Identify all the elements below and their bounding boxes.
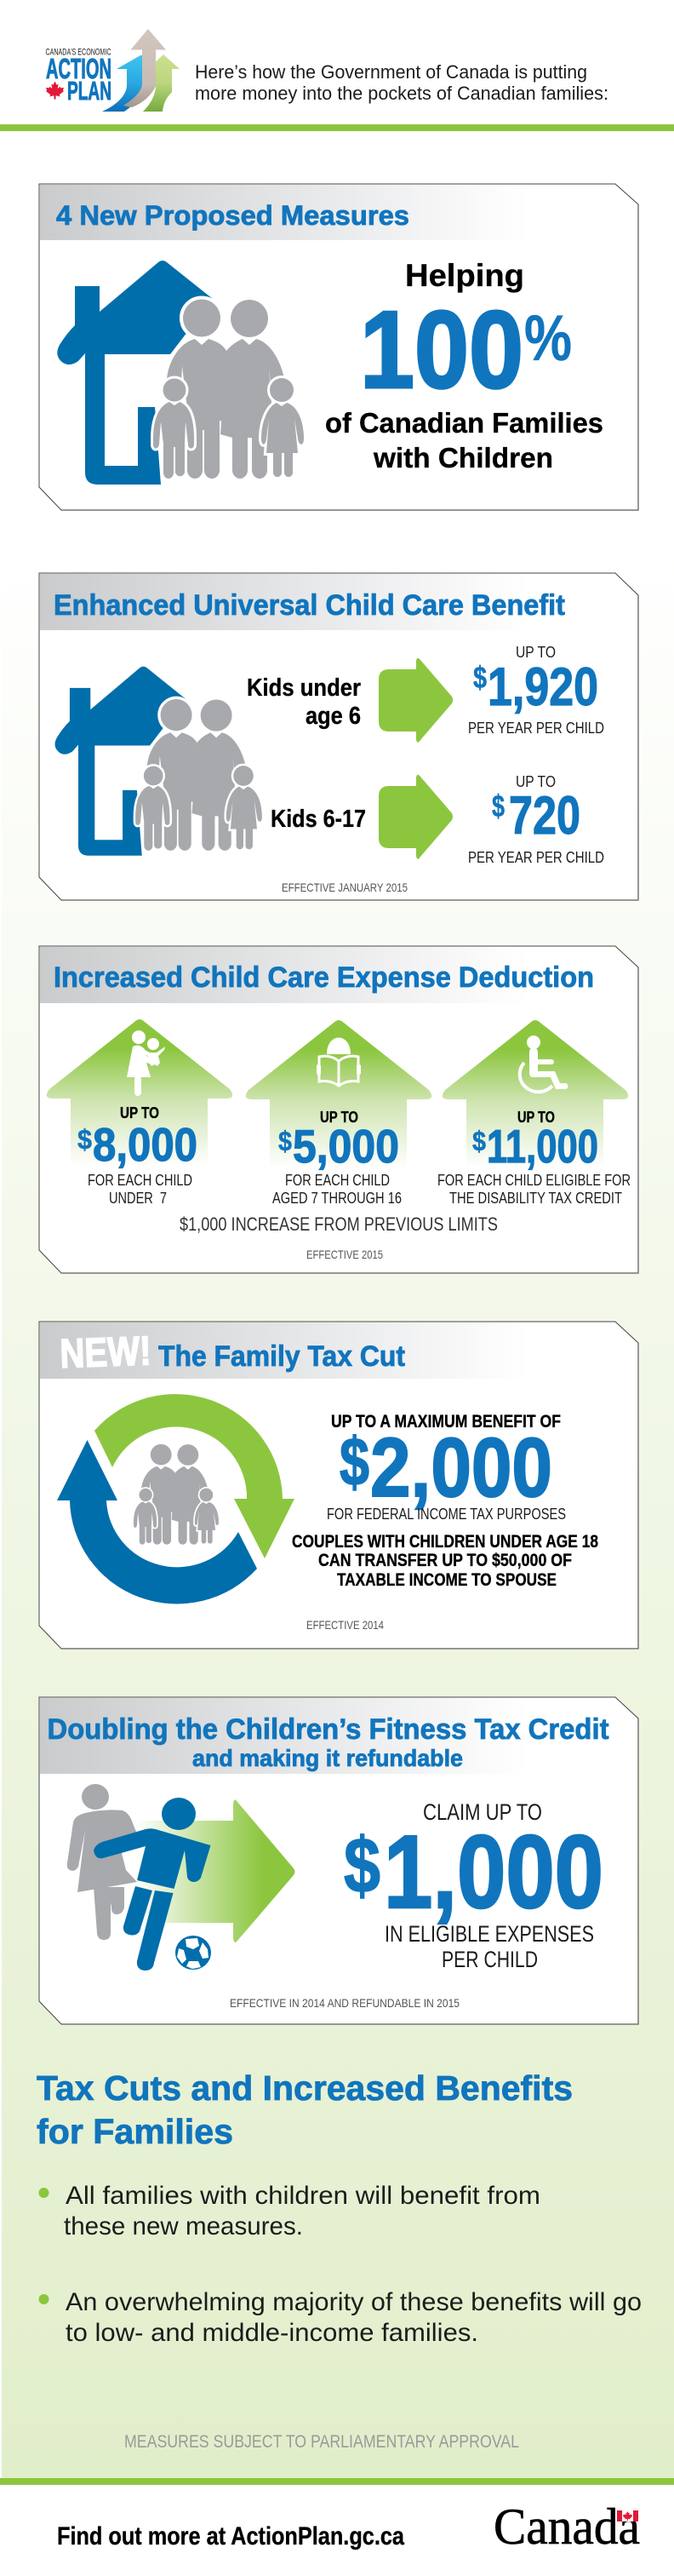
stat: helping 100%: Helping — [405, 258, 524, 293]
heading — [48, 1713, 609, 1771]
heading: 4 New Proposed Measures — [56, 200, 409, 231]
claim text: IN ELIGIBLE EXPENSES — [385, 1921, 594, 1947]
icon: adult figure — [67, 1784, 141, 1940]
bullet: overwhelming majority: to low- and middle-income families. — [66, 2319, 478, 2347]
wordmark: Canada: Canada — [494, 2499, 640, 2555]
icon: circular arrows — [57, 1394, 294, 1604]
row: kids 6-17: Kids 6-17 — [271, 806, 366, 833]
icon: soccer ball — [175, 1936, 211, 1970]
benefit text — [292, 1412, 598, 1590]
logo: Canada's Economic Action Plan: ACTION — [46, 53, 111, 84]
page background — [2, 545, 674, 2478]
benefit text: $ — [340, 1424, 369, 1500]
column: disability tax credit: THE DISABILITY TAX CREDIT — [449, 1190, 622, 1207]
intro text — [195, 61, 608, 104]
column: child aged 7 through 16: 5,000 — [293, 1120, 399, 1173]
heading: The Family Tax Cut — [158, 1340, 405, 1373]
bullet: overwhelming majority — [39, 2288, 642, 2347]
row: kids under age 6: PER YEAR PER CHILD — [468, 720, 604, 737]
intro text: more money into the pockets of Canadian families: — [195, 83, 608, 104]
heading: Enhanced Universal Child Care Benefit — [54, 589, 565, 622]
panel: enhanced universal child care benefit — [39, 573, 638, 900]
bullet: overwhelming majority: An overwhelming majority of these benefits will go — [66, 2288, 642, 2316]
row: kids 6-17: 720 — [509, 786, 580, 846]
claim text: CLAIM UP TO — [423, 1799, 542, 1825]
benefit text: COUPLES WITH CHILDREN UNDER AGE 18 — [292, 1532, 598, 1552]
stat: helping 100%: 100 — [360, 289, 523, 411]
benefit text: UP TO A MAXIMUM BENEFIT OF — [331, 1412, 561, 1431]
row: kids under age 6: Kids under — [247, 674, 361, 702]
claim text — [344, 1799, 603, 1972]
top green rule — [0, 124, 674, 131]
icon: parent and baby — [127, 1030, 165, 1096]
heading: Increased Child Care Expense Deduction — [54, 961, 594, 994]
benefit text: CAN TRANSFER UP TO $50,000 OF — [318, 1551, 572, 1570]
icon: soccer player — [94, 1798, 211, 1971]
bullet: all families: these new measures. — [64, 2212, 303, 2240]
note: increase from previous limits: $1,000 INCREASE FROM PREVIOUS LIMITS — [180, 1213, 498, 1235]
effective date: EFFECTIVE 2014 — [306, 1618, 384, 1632]
heading: tax cuts and increased benefits — [37, 2068, 573, 2151]
claim text: PER CHILD — [442, 1947, 538, 1972]
icon: house and family — [57, 261, 304, 485]
column: child aged 7 through 16: AGED 7 THROUGH 16 — [272, 1190, 402, 1207]
logo: Canada's Economic Action Plan: CANADA'S ECONOMIC — [46, 48, 111, 58]
column: child under 7: UNDER 7 — [109, 1190, 167, 1207]
row: kids 6-17 — [271, 773, 604, 866]
heading: tax cuts and increased benefits: for Families — [37, 2112, 233, 2151]
icon: child reading book — [317, 1037, 361, 1086]
stat: helping 100%: of Canadian Families — [325, 407, 603, 439]
row: kids under age 6: UP TO — [516, 644, 556, 661]
icon: green arrow — [136, 1799, 294, 1942]
row: kids 6-17: PER YEAR PER CHILD — [468, 849, 604, 866]
intro text: Here’s how the Government of Canada is putting — [195, 61, 587, 83]
column: child under 7 — [47, 1019, 232, 1207]
column: child under 7: FOR EACH CHILD — [88, 1172, 192, 1189]
stat: helping 100%: with Children — [373, 442, 553, 473]
effective date: EFFECTIVE 2015 — [306, 1248, 383, 1261]
column: disability tax credit — [437, 1020, 631, 1207]
bullet: all families — [39, 2182, 540, 2240]
column: child under 7: UP TO — [120, 1104, 159, 1122]
bullet: all families: All families with children will benefit from — [66, 2182, 540, 2210]
claim text: $ — [344, 1822, 380, 1909]
footnote: MEASURES SUBJECT TO PARLIAMENTARY APPROVAL — [124, 2432, 519, 2452]
stat: helping 100%: % — [524, 302, 572, 375]
row: kids under age 6: $ — [473, 660, 487, 695]
panel: increased child care expense deduction — [39, 946, 638, 1273]
effective date: EFFECTIVE IN 2014 AND REFUNDABLE IN 2015 — [230, 1996, 460, 2010]
panel: the family tax cut — [39, 1322, 638, 1649]
icon: house and family — [55, 667, 262, 856]
benefit text: 2,000 — [370, 1420, 552, 1514]
effective date: EFFECTIVE JANUARY 2015 — [282, 881, 408, 894]
bottom green rule — [0, 2478, 674, 2485]
panel: 4 new proposed measures — [39, 184, 638, 510]
column: disability tax credit: UP TO — [517, 1109, 555, 1126]
column: disability tax credit: 11,000 — [487, 1120, 598, 1173]
header — [46, 29, 608, 112]
row: kids 6-17: UP TO — [516, 773, 556, 790]
heading: and making it refundable — [192, 1745, 463, 1771]
column: child aged 7 through 16: UP TO — [320, 1109, 358, 1126]
logo: Canada's Economic Action Plan: PLAN — [67, 76, 111, 106]
logo: Canada's Economic Action Plan — [46, 29, 180, 112]
column: child aged 7 through 16 — [246, 1020, 431, 1207]
column: child aged 7 through 16: $ — [278, 1126, 292, 1156]
benefit text: FOR FEDERAL INCOME TAX PURPOSES — [327, 1506, 566, 1523]
column: disability tax credit: FOR EACH CHILD ELIGIBLE FOR — [437, 1172, 631, 1189]
icon: wheelchair — [520, 1036, 568, 1092]
benefit text: TAXABLE INCOME TO SPOUSE — [337, 1570, 557, 1590]
row: kids under age 6: 1,920 — [488, 657, 598, 717]
row: kids 6-17: $ — [492, 789, 505, 823]
icon: family — [134, 1444, 219, 1545]
heading: Doubling the Children’s Fitness Tax Credit — [48, 1713, 609, 1746]
claim text: 1,000 — [384, 1814, 603, 1930]
heading: NEW! — [60, 1328, 151, 1377]
footer link: Find out more at ActionPlan.gc.ca — [57, 2522, 404, 2550]
column: child under 7: 8,000 — [93, 1118, 197, 1171]
row: kids under age 6 — [247, 644, 604, 743]
column: child under 7: $ — [77, 1124, 92, 1155]
stat: helping 100% — [325, 258, 603, 473]
panel: children's fitness tax credit — [39, 1697, 638, 2024]
row: kids under age 6: age 6 — [306, 703, 361, 730]
column: child aged 7 through 16: FOR EACH CHILD — [285, 1172, 390, 1189]
heading — [60, 1328, 405, 1377]
heading: tax cuts and increased benefits: Tax Cuts and Increased Benefits — [37, 2068, 573, 2108]
column: disability tax credit: $ — [472, 1126, 486, 1156]
